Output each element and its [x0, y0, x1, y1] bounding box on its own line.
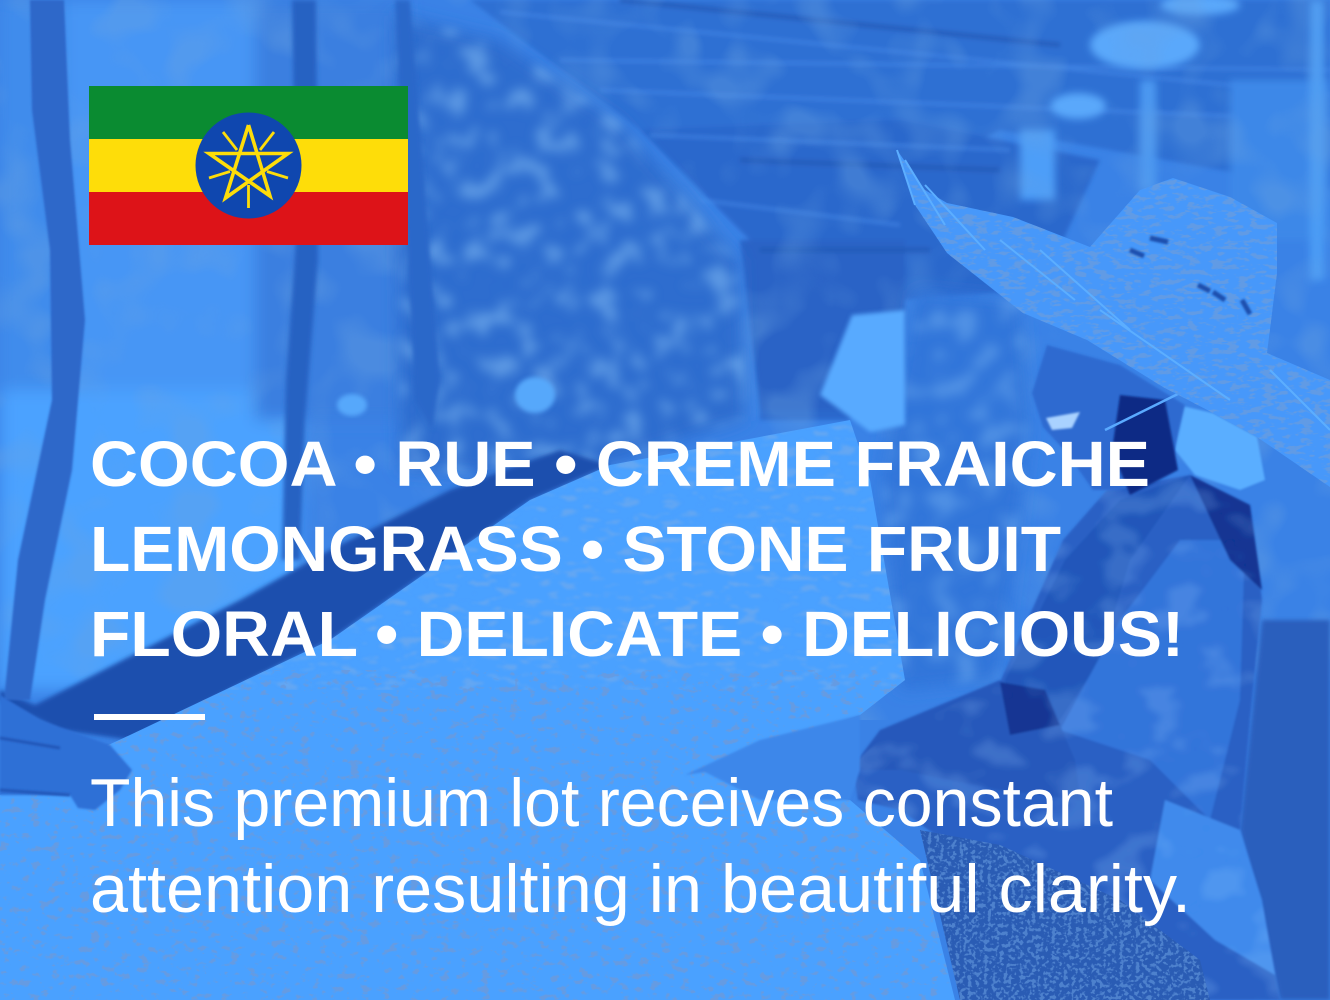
lower right background [1240, 620, 1330, 1000]
net [920, 830, 1210, 1000]
bright opening in the plant row [820, 310, 905, 432]
mottled photo blur [0, 0, 1330, 720]
tasting notes heading [90, 428, 1184, 670]
tasting notes heading: LEMONGRASS • STONE FRUIT [90, 513, 1061, 585]
description text: attention resulting in beautiful clarity. [90, 851, 1191, 927]
shade net canopy, top right [470, 0, 1330, 420]
flag of Ethiopia [89, 86, 408, 245]
straw hat [890, 150, 1330, 490]
background light patches, top right [1020, 0, 1330, 280]
tasting notes heading: COCOA • RUE • CREME FRAICHE [90, 428, 1150, 500]
hands on the bed [685, 715, 860, 800]
plant rows [395, 15, 1030, 690]
divider rule [94, 714, 205, 720]
flag emblem [196, 112, 302, 218]
tree trunks [4, 0, 85, 700]
background wall, upper left [0, 0, 405, 690]
hands at left edge [0, 695, 132, 810]
hair [1175, 405, 1265, 490]
neck and face [1032, 345, 1185, 490]
jacket [850, 470, 1290, 1000]
description text: This premium lot receives constant [90, 765, 1113, 841]
coffee bean bed [0, 420, 955, 1000]
description text [90, 765, 1191, 927]
woman in straw hat [685, 345, 1330, 1000]
tasting notes heading: FLORAL • DELICATE • DELICIOUS! [90, 598, 1184, 670]
dark ground edge beside bed [0, 450, 610, 740]
